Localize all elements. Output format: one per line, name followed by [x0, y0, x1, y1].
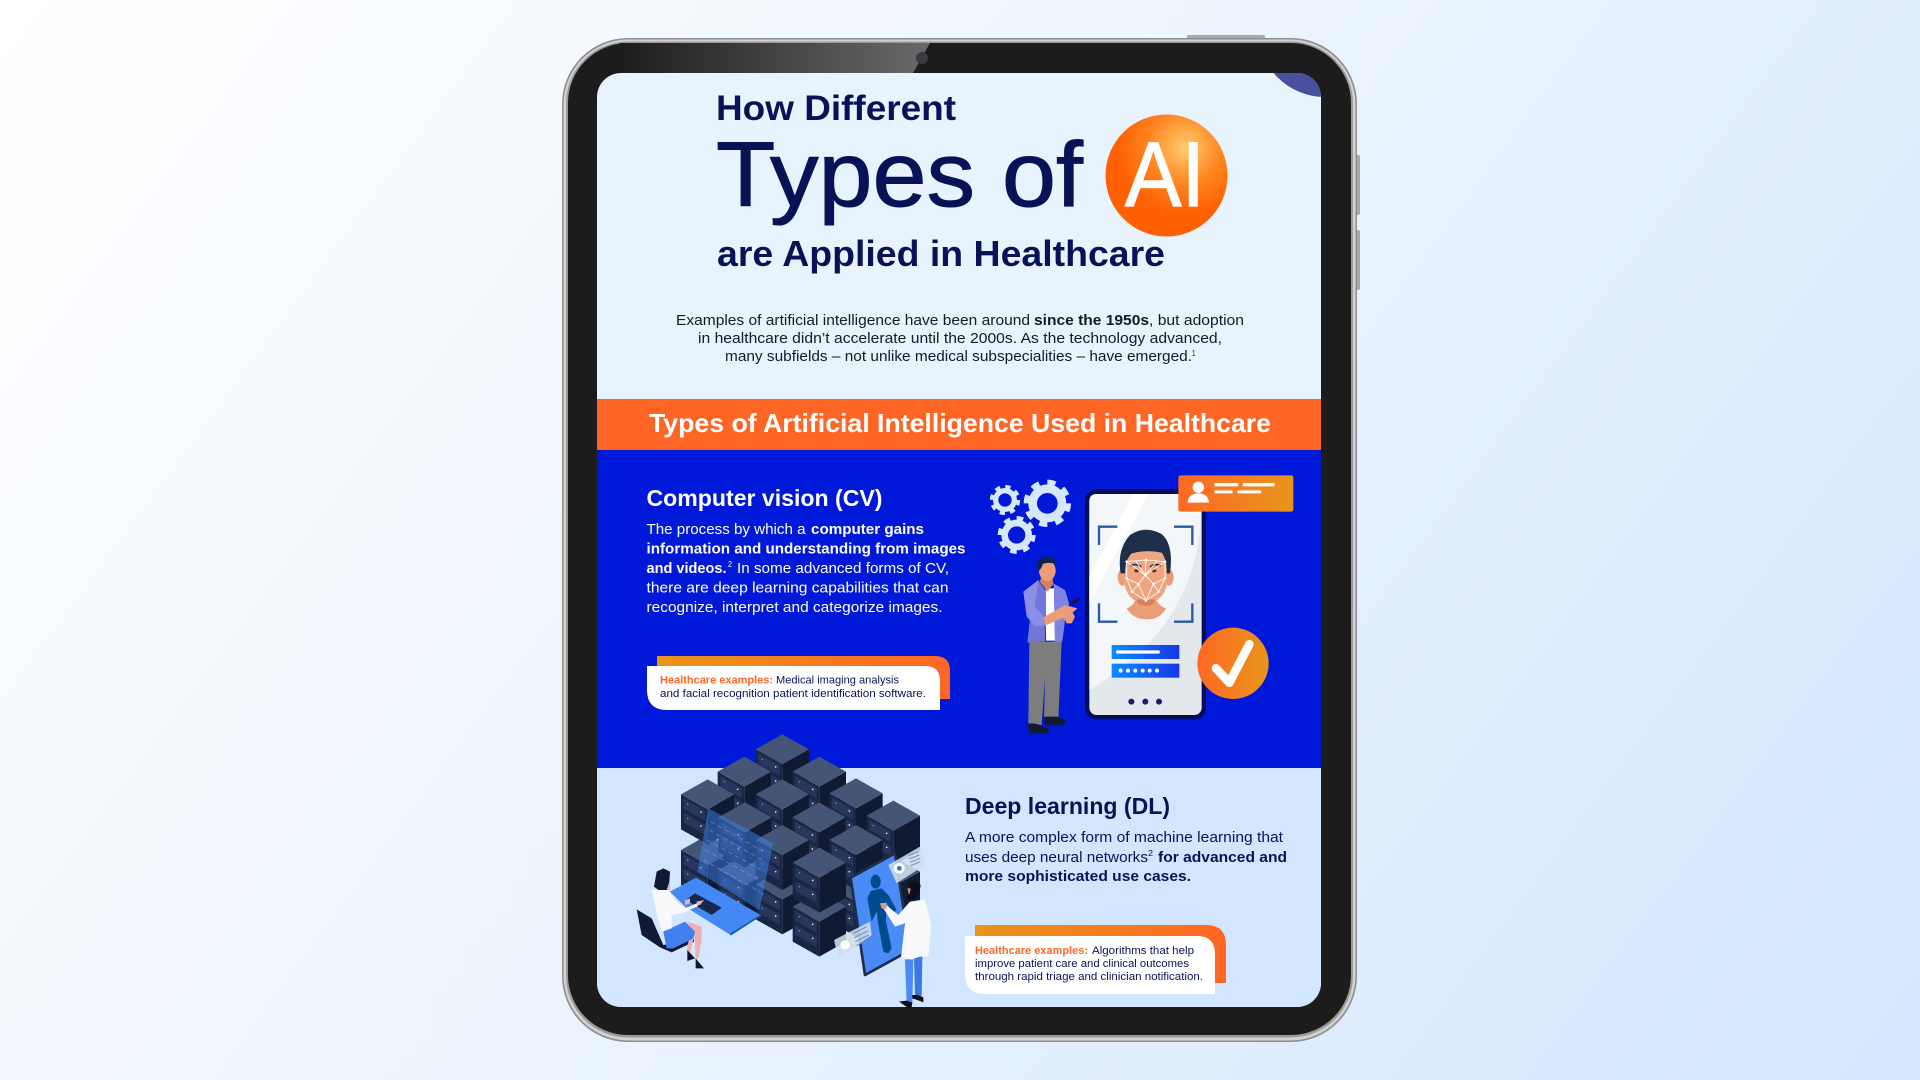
holographic data panel	[697, 808, 773, 910]
intro paragraph: , but adoption	[1149, 313, 1244, 329]
text block: computer vision description: recognize, interpret and categorize images.	[646, 600, 942, 616]
heading: deep learning: Deep learning (DL)	[965, 793, 1170, 819]
login fields	[1112, 645, 1179, 678]
phone body	[1085, 489, 1206, 719]
face scan brackets	[1099, 527, 1192, 622]
text block: deep learning description: uses deep neural networks	[965, 850, 1148, 866]
floating data cards	[834, 847, 925, 958]
illustration: servers with clinicians	[637, 734, 931, 1007]
callout: deep learning healthcare examples: through rapid triage and clinician notification.	[975, 971, 1203, 983]
panel: computer vision background	[597, 450, 1321, 768]
tablet device	[562, 35, 1360, 1042]
text block: computer vision description: information and understanding from images	[646, 542, 966, 558]
callout: deep learning healthcare examples: Algorithms that help	[1092, 945, 1194, 957]
callout: deep learning healthcare examples: improve patient care and clinical outcomes	[975, 958, 1190, 970]
text block: deep learning description	[965, 830, 1287, 885]
intro paragraph: since the 1950s	[1034, 313, 1149, 329]
face with mesh	[1118, 530, 1174, 619]
man with smartphone	[1023, 557, 1080, 733]
title	[716, 89, 1165, 274]
callout: computer vision healthcare examples: Medical imaging analysis	[776, 674, 900, 686]
doctor	[880, 881, 931, 1007]
intro paragraph: Examples of artificial intelligence have been around	[676, 313, 1030, 329]
text block: deep learning description: for advanced and	[1158, 850, 1287, 866]
panel: deep learning background	[597, 768, 1321, 1007]
section banner	[597, 399, 1321, 450]
icon: AI badge: AI	[1125, 124, 1205, 226]
icon: AI badge	[1106, 114, 1228, 236]
body scan tablet	[851, 853, 910, 975]
icon: check badge	[1197, 628, 1269, 699]
title: are Applied in Healthcare	[717, 233, 1165, 274]
text block: computer vision description: In some advanced forms of CV,	[737, 561, 949, 577]
text block: computer vision description: and videos.	[646, 561, 726, 577]
heading: computer vision: Computer vision (CV)	[646, 485, 882, 511]
desk with keyboard	[670, 878, 762, 936]
text block: deep learning description: A more complex form of machine learning that	[965, 830, 1283, 846]
corner accent circle	[1274, 73, 1321, 97]
text block: computer vision description: 2	[728, 560, 732, 569]
woman at keyboard	[637, 868, 704, 968]
phone dots	[1128, 699, 1162, 705]
text block: deep learning description: 2	[1148, 849, 1154, 858]
title: How Different	[716, 89, 956, 128]
text block: computer vision description: computer gains	[811, 522, 924, 538]
text block: computer vision description: The process by which a	[646, 522, 806, 538]
callout: deep learning healthcare examples	[965, 925, 1226, 994]
server stack	[681, 734, 920, 957]
intro paragraph: 1	[1192, 349, 1196, 358]
icon: gears	[992, 483, 1068, 552]
intro paragraph: many subfields – not unlike medical subspecialities – have emerged.	[725, 349, 1192, 365]
callout: computer vision healthcare examples	[647, 656, 950, 710]
text block: computer vision description	[646, 522, 966, 616]
title: Types of	[716, 124, 1083, 226]
callout: computer vision healthcare examples: and facial recognition patient identification software.	[660, 688, 926, 700]
profile card	[1178, 475, 1293, 512]
callout: deep learning healthcare examples: Healthcare examples:	[975, 945, 1088, 957]
callout: computer vision healthcare examples: Healthcare examples:	[660, 674, 773, 686]
section banner: Types of Artificial Intelligence Used in Healthcare	[649, 408, 1271, 438]
intro paragraph	[676, 313, 1244, 365]
intro paragraph: in healthcare didn’t accelerate until the 2000s. As the technology advanced,	[698, 331, 1222, 347]
text block: computer vision description: there are deep learning capabilities that can	[646, 580, 948, 596]
illustration: facial recognition phone	[992, 475, 1293, 733]
text block: deep learning description: more sophisticated use cases.	[965, 869, 1191, 885]
screen	[597, 73, 1321, 1007]
